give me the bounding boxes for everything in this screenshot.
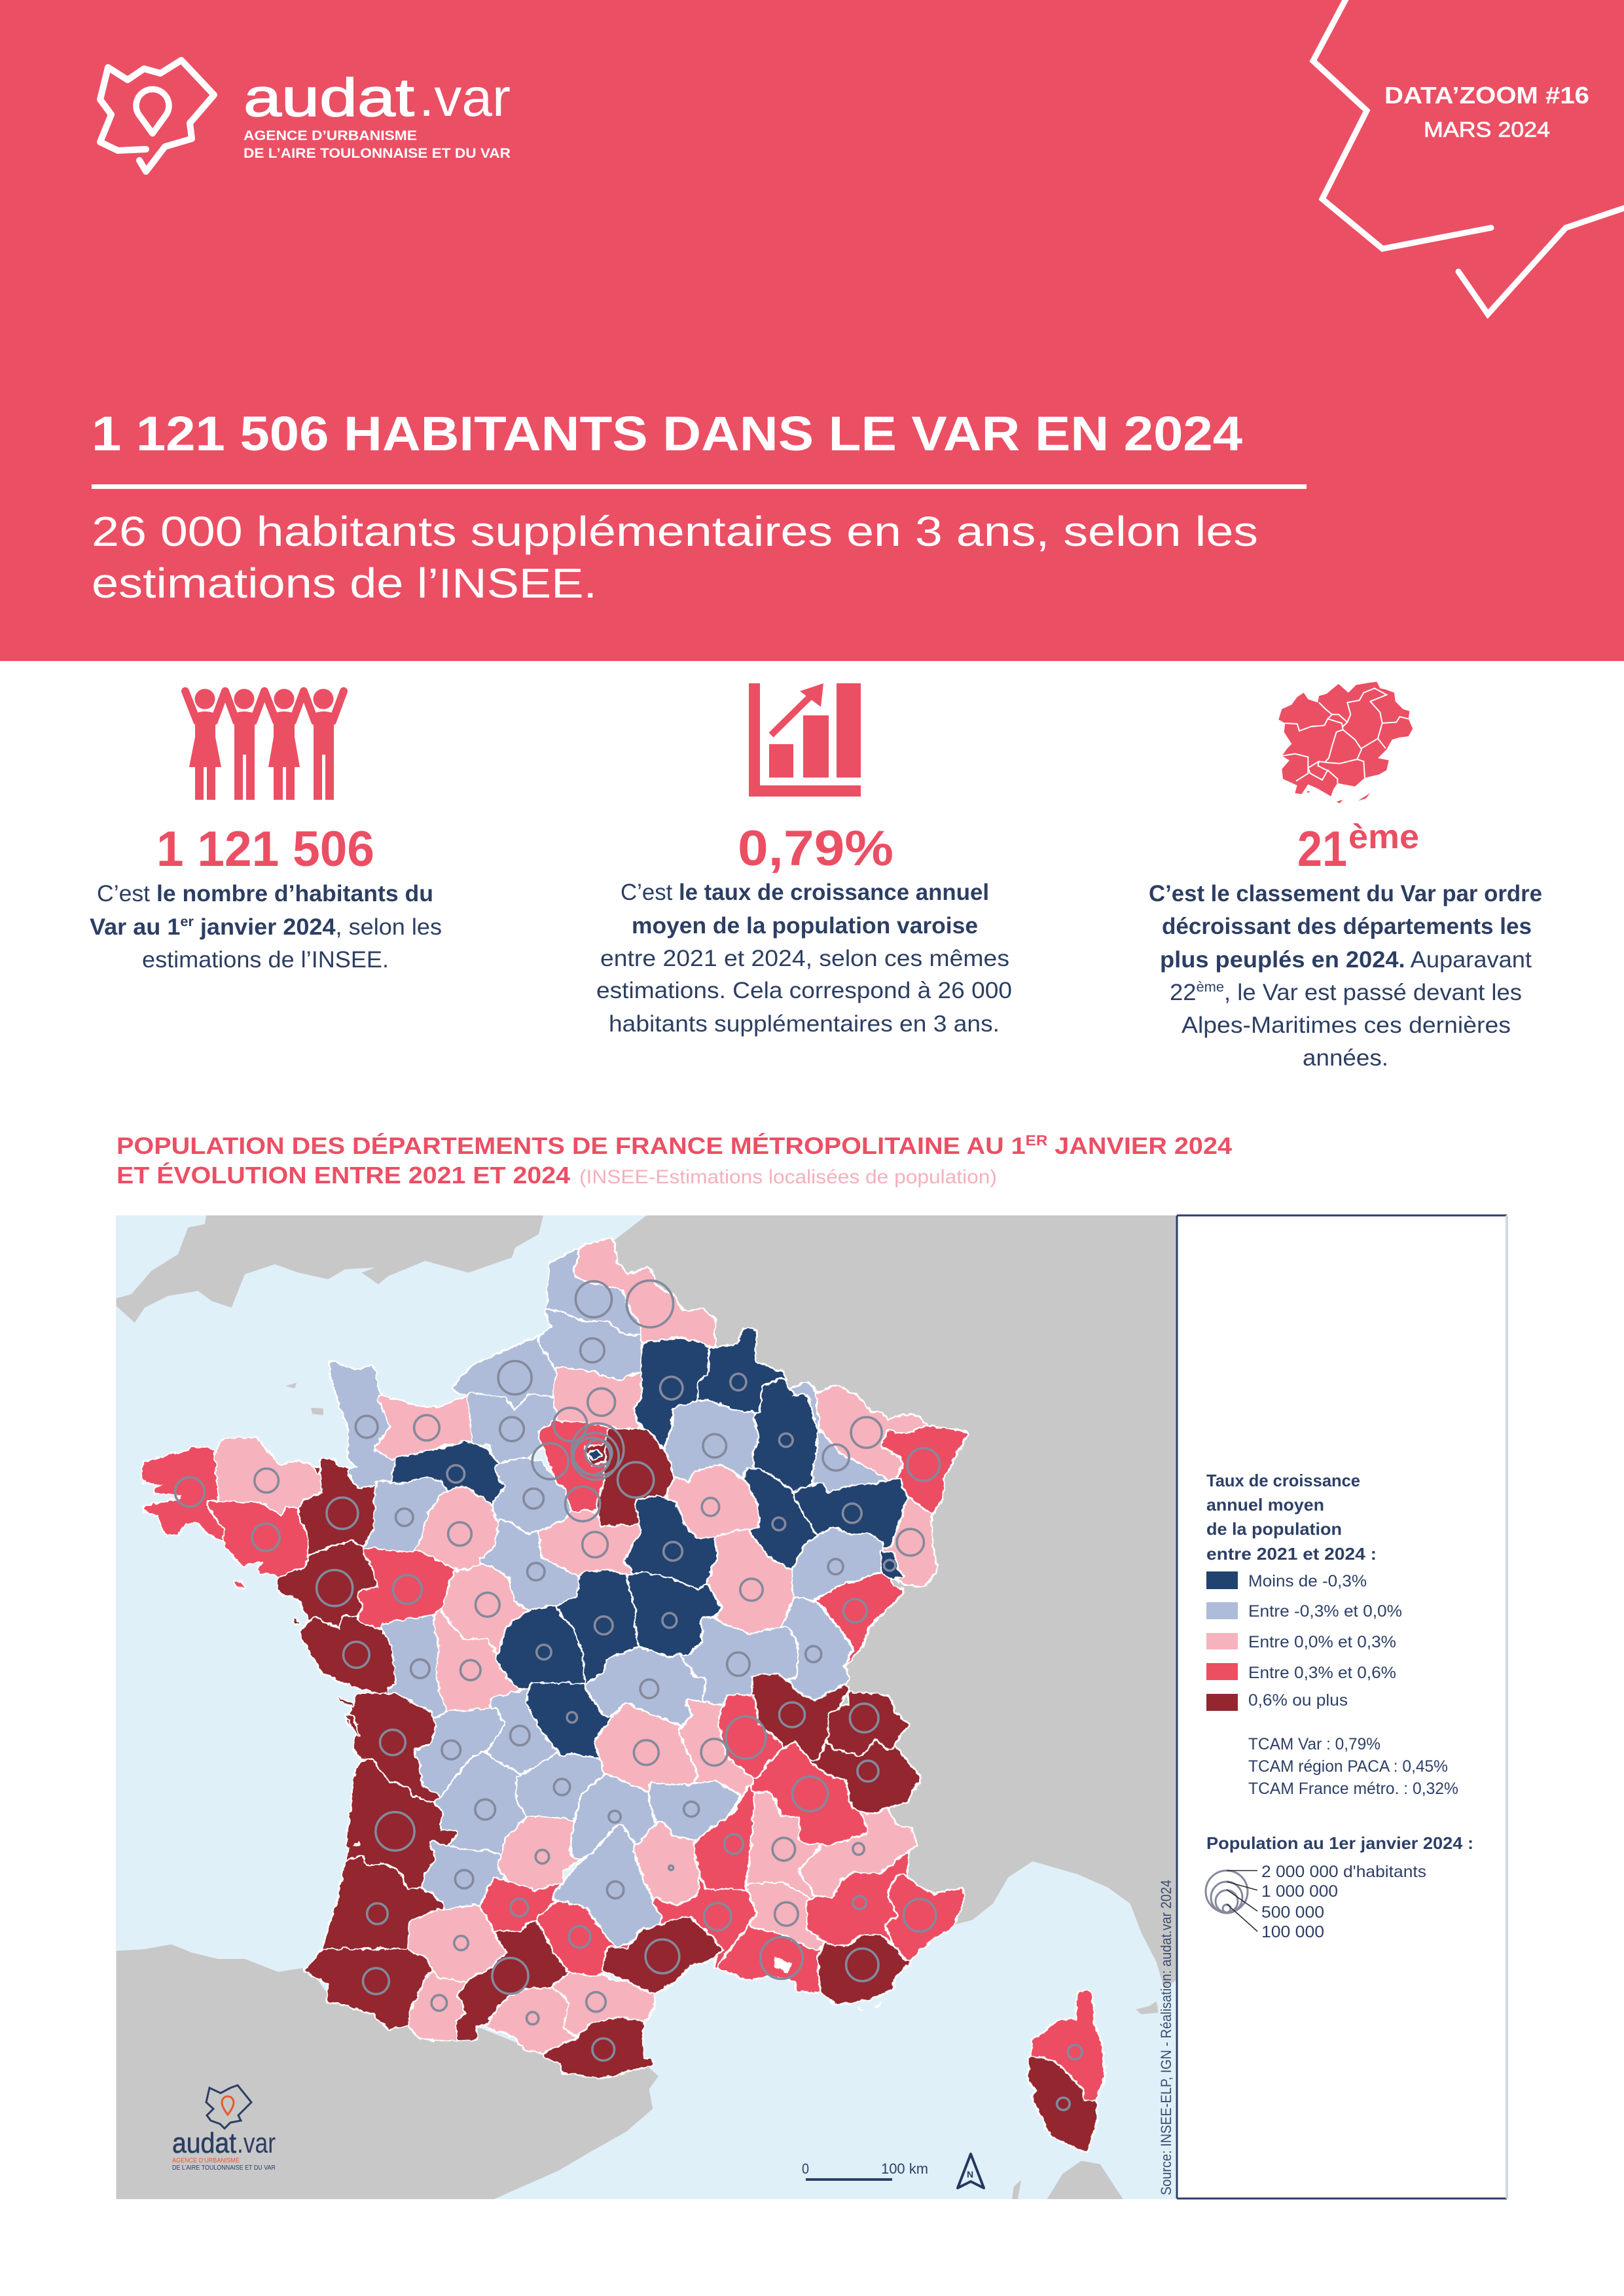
description: ème	[1197, 980, 1224, 995]
description	[90, 881, 442, 973]
description: Alpes-Maritimes ces dernières	[1182, 1013, 1511, 1038]
proportional circles legend: 1 000 000	[1261, 1882, 1338, 1901]
description: Var au 1	[90, 914, 336, 940]
map logo: audat.var: DE L’AIRE TOULONNAISE ET DU VAR	[172, 2164, 276, 2172]
legend class labels: Entre -0,3% et 0,0%	[1248, 1602, 1402, 1621]
map logo: audat.var: .var	[237, 2127, 276, 2159]
population proportional circles	[175, 1281, 1082, 2110]
map logo: audat.var: AGENCE D’URBANISME	[172, 2157, 240, 2164]
departments: north-east	[578, 1242, 963, 1728]
neighbouring land	[117, 1213, 1179, 2202]
number: 21	[1297, 821, 1347, 877]
title rule	[92, 484, 1307, 489]
number	[1297, 818, 1419, 877]
description: plus peuplés en 2024. Auparavant	[1160, 947, 1532, 973]
description: estimations. Cela correspond à 26 000	[596, 978, 1012, 1003]
logo: audat.var: DE L’AIRE TOULONNAISE ET DU VAR	[244, 146, 511, 161]
legend class labels: Entre 0,3% et 0,6%	[1248, 1664, 1396, 1682]
legend class labels	[1248, 1572, 1402, 1710]
north arrow: N	[967, 2169, 973, 2179]
icon: rising bar chart	[749, 683, 861, 797]
map source note: Source: INSEE-ELP, IGN - Réalisation: audat.var 2024	[1158, 1880, 1174, 2195]
description: décroissant des départements les	[1162, 914, 1532, 939]
description: , le Var est passé devant les	[1224, 980, 1522, 1005]
description: entre 2021 et 2024, selon ces mêmes	[600, 946, 1009, 971]
description	[596, 880, 1012, 1037]
scale bar	[802, 2161, 928, 2181]
TCAM values	[1248, 1735, 1458, 1798]
proportional circles legend: 500 000	[1261, 1903, 1324, 1922]
legend swatches	[1206, 1571, 1238, 1711]
key figure 3: ranking	[1149, 682, 1542, 1071]
departments: south-east	[557, 1677, 1101, 2148]
issue label: DATA’ZOOM #16	[1384, 82, 1589, 109]
subtitle: 26 000 habitants supplémentaires en 3 ans, selon les	[92, 508, 1258, 555]
subtitle	[92, 508, 1258, 607]
legend title: growth rate	[1206, 1471, 1377, 1564]
description: 22	[1170, 980, 1195, 1005]
main title: 1 121 506 HABITANTS DANS LE VAR EN 2024	[92, 406, 1242, 461]
logo: audat.var: .var	[419, 68, 511, 128]
number: ème	[1348, 818, 1419, 856]
map section heading: JANVIER 2024	[1047, 1132, 1232, 1159]
issue label	[1384, 82, 1589, 141]
description: habitants supplémentaires en 3 ans.	[609, 1011, 1000, 1037]
proportional circles legend	[1206, 1863, 1426, 1941]
description: janvier 2024	[194, 914, 336, 940]
map section heading: (INSEE-Estimations localisées de population)	[579, 1166, 997, 1188]
departments: north-west	[147, 1249, 645, 1721]
map logo: audat.var	[172, 2085, 276, 2172]
legend title: growth rate: entre 2021 et 2024 :	[1206, 1544, 1377, 1564]
description: , selon les	[336, 914, 439, 940]
legend class labels: Moins de -0,3%	[1248, 1572, 1367, 1590]
number: 1 121 506	[156, 821, 374, 877]
scale bar: 0	[802, 2161, 809, 2177]
icon: Var department map	[1278, 682, 1413, 803]
description: C’est le nombre d’habitants du	[97, 881, 433, 906]
description: estimations de l’INSEE.	[142, 947, 389, 973]
sea	[116, 1215, 1177, 2199]
scale bar: 100 km	[881, 2161, 928, 2177]
legend title: growth rate: de la population	[1206, 1519, 1342, 1539]
description: er	[180, 914, 194, 929]
description	[1149, 881, 1542, 1071]
key figure 1: population	[90, 689, 442, 973]
map section heading: ER	[1026, 1132, 1047, 1149]
legend class labels: 0,6% ou plus	[1248, 1691, 1348, 1710]
proportional circles legend: 100 000	[1261, 1923, 1324, 1941]
proportional circles legend: 2 000 000 d'habitants	[1261, 1863, 1426, 1881]
issue label: MARS 2024	[1424, 118, 1550, 141]
logo: audat.var: audat	[244, 68, 414, 128]
north arrow	[958, 2154, 984, 2188]
map section heading: POPULATION DES DÉPARTEMENTS DE FRANCE MÉTROPOLITAINE AU 1	[117, 1132, 943, 1159]
number: 0,79%	[738, 821, 893, 876]
subtitle: estimations de l’INSEE.	[92, 560, 597, 607]
legend title: growth rate: Taux de croissance	[1206, 1471, 1360, 1490]
departments by growth class	[147, 1242, 1101, 2148]
description: années.	[1303, 1045, 1388, 1071]
icon: four people with raised arms	[185, 689, 344, 800]
description: C’est le classement du Var par ordre	[1149, 881, 1542, 906]
map section heading	[117, 1132, 1232, 1189]
map of France	[116, 1213, 1179, 2202]
map logo: audat.var: audat	[172, 2127, 236, 2159]
legend title: population: Population au 1er janvier 2024 :	[1206, 1833, 1473, 1853]
description: C’est le taux de croissance annuel	[621, 880, 989, 905]
legend panel	[1177, 1215, 1507, 2198]
logo: audat.var	[100, 60, 511, 171]
logo: audat.var: AGENCE D’URBANISME	[244, 128, 417, 143]
description: moyen de la population varoise	[632, 913, 978, 939]
legend class labels: Entre 0,0% et 0,3%	[1248, 1633, 1396, 1651]
header banner	[0, 0, 1624, 661]
speech-bubble outline	[1313, 0, 1624, 314]
TCAM values: TCAM France métro. : 0,32%	[1248, 1780, 1458, 1798]
TCAM values: TCAM Var : 0,79%	[1248, 1735, 1380, 1753]
legend title: growth rate: annuel moyen	[1206, 1495, 1324, 1515]
TCAM values: TCAM région PACA : 0,45%	[1248, 1757, 1448, 1776]
departments: south-west	[308, 1687, 653, 2075]
key figure 2: growth rate	[596, 683, 1012, 1037]
map section heading: ET ÉVOLUTION ENTRE 2021 ET 2024	[117, 1162, 570, 1189]
